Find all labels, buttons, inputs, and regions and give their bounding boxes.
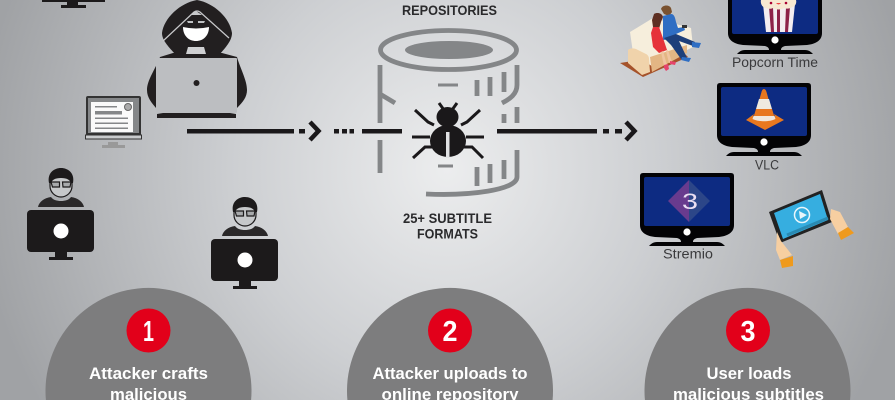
text: step 2 caption [372, 364, 528, 400]
player: VLC [717, 83, 811, 172]
icon: user at desktop right [211, 197, 278, 289]
label: VLC: VLC [755, 158, 779, 172]
text: 25+ subtitle formats [403, 210, 492, 242]
label: Popcorn Time: Popcorn Time [732, 55, 818, 70]
icon: cropped monitor top left [42, 0, 105, 8]
text: step 3 caption [673, 364, 824, 400]
text: step 1 caption [89, 364, 208, 400]
panel: step 1 [46, 288, 252, 400]
arrow: attacker to repository [187, 122, 402, 140]
icon: monitor with code document [86, 96, 142, 148]
heading: repositories: REPOSITORIES [402, 2, 497, 18]
badge: 2 [428, 308, 472, 352]
icon: hooded hacker with laptop [147, 0, 247, 118]
badge: 1: 1 [143, 316, 154, 348]
icon: couple on sofa [620, 5, 701, 77]
badge: 3 [726, 308, 770, 352]
icon: database cylinder [380, 30, 517, 194]
badge: 3: 3 [740, 316, 756, 348]
badge: 1 [126, 308, 170, 352]
text: 25+ subtitle formats: FORMATS [417, 226, 478, 242]
player: Stremio [640, 173, 734, 262]
icon: VLC cone [746, 89, 784, 130]
text: step 2 caption: Attacker uploads to [372, 364, 528, 383]
text: 25+ subtitle formats: 25+ SUBTITLE [403, 210, 492, 226]
badge: 2: 2 [442, 316, 458, 348]
icon: popcorn bucket [761, 0, 796, 32]
player: Popcorn Time [728, 0, 822, 70]
label: Stremio: Stremio [663, 246, 713, 262]
panel: step 2 [347, 288, 553, 400]
text: step 1 caption: Attacker crafts [89, 364, 208, 383]
icon: bug [412, 103, 484, 158]
icon: user at desktop left [27, 168, 94, 260]
text: step 3 caption: User loads [706, 364, 792, 383]
icon: Stremio diamond logo: 3 [682, 189, 698, 214]
arrow: repository to player [497, 122, 634, 140]
panel: step 3 [644, 288, 850, 400]
icon: hands holding tablet [769, 190, 854, 268]
